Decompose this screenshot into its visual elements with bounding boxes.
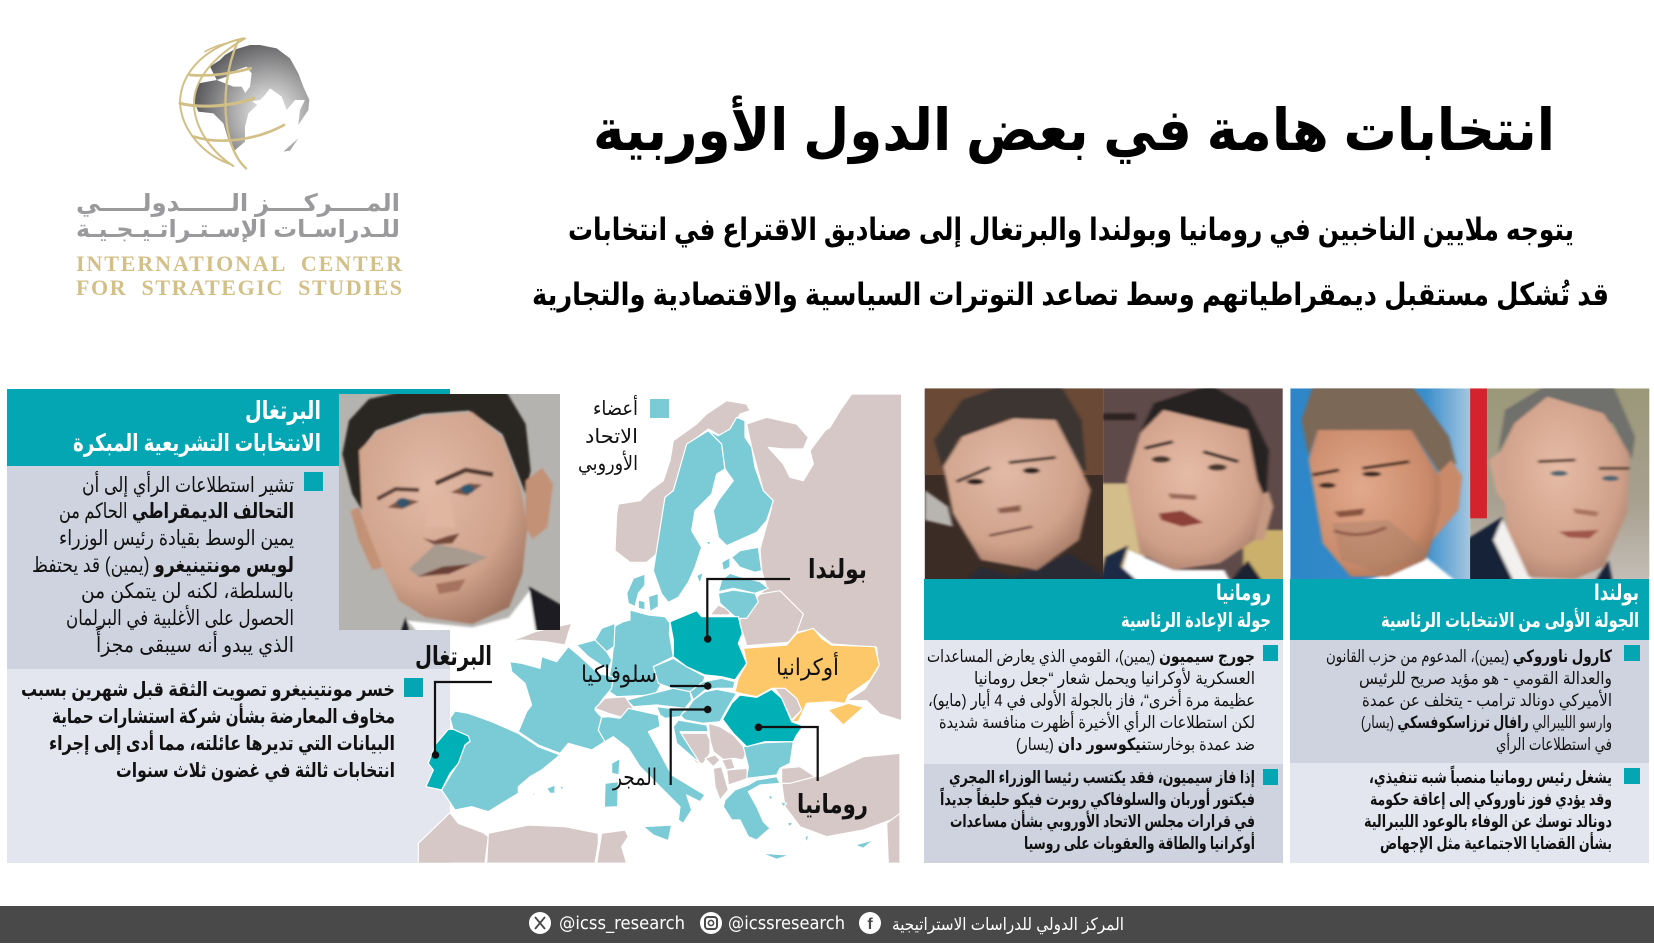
legend text: الأوروبي [578, 451, 638, 476]
body block 1: الأميركي دونالد ترامب - يتخلف عن عمدة [1362, 690, 1612, 711]
north: Scandinavia, Finland, Baltics, Russia [615, 394, 902, 721]
body block 2 [1290, 763, 1649, 863]
panel: Poland [1290, 579, 1649, 863]
header country: بولندا [1594, 580, 1639, 606]
logo: ICSS globe and name [76, 38, 403, 300]
body block 1: كارول ناوروكي (يمين)، المدعوم من حزب القانون [1326, 647, 1612, 667]
icon: facebook: f [867, 916, 873, 933]
map of Europe [418, 394, 902, 863]
footer organisation name: المركز الدولي للدراسات الاستراتيجية [892, 915, 1124, 935]
leader dots [432, 635, 762, 759]
body block 2: فيكتور أوربان والسلوفاكي روبرت فيكو حليفاً جديداً [940, 786, 1255, 810]
body block 1: في استطلاعات الرأي [1496, 733, 1612, 755]
bullet square [304, 472, 323, 491]
label: Poland: بولندا [808, 554, 867, 585]
paragraph lines: تشير استطلاعات الرأي إلى أن [82, 471, 294, 498]
leader lines [435, 579, 818, 785]
photos: Romania candidates [925, 385, 1288, 583]
paragraph lines: التحالف الديمقراطي الحاكم من [59, 500, 294, 524]
legend text [578, 395, 638, 476]
paragraph lines [32, 471, 294, 657]
paragraph lines: الحصول على الأغلبية في البرلمان [66, 605, 294, 630]
icon: X [529, 912, 551, 934]
paragraph lines: الذي يبدو أنه سيبقى مجزأً [96, 625, 294, 657]
text block: Portugal bullet 2 [21, 678, 423, 783]
panel: Romania [924, 579, 1283, 863]
highlighted: Romania [723, 689, 803, 747]
paragraph lines: خسر مونتينيغرو تصويت الثقة قبل شهرين بسبب [21, 679, 395, 701]
legend text: أعضاء [593, 395, 638, 420]
map labels and leader lines [415, 554, 868, 820]
body block 2 [924, 764, 1283, 863]
header band [1290, 579, 1649, 640]
body block 1: والعدالة القومي - هو مؤيد صريح للرئيس [1359, 669, 1612, 689]
paragraph lines: انتخابات ثالثة في غضون ثلاث سنوات [116, 760, 395, 783]
icon: instagram [700, 912, 722, 934]
footer handle: X: @icss_research [559, 913, 685, 934]
footer bar [0, 906, 1654, 943]
west: France, Iberia, North Africa [418, 623, 633, 863]
legend text: الاتحاد [585, 426, 638, 448]
paragraph lines: بالسلطة، لكنه لن يتمكن من [81, 580, 294, 603]
body block 2: في قرارات مجلس الاتحاد الأوروبي بشأن مساعدات [950, 810, 1255, 832]
bullet square [404, 678, 423, 697]
label: Slovakia: سلوفاكيا [581, 661, 657, 688]
header country: البرتغال [245, 397, 321, 426]
icon: facebook [859, 912, 881, 934]
header election: الانتخابات التشريعية المبكرة [73, 430, 321, 457]
logo English name line 2: FOR STRATEGIC STUDIES [76, 275, 402, 300]
logo Arabic name line 1: المــــركــــز الــــــدولـــــي [76, 190, 400, 217]
body block 2: إذا فاز سيميون، فقد يكتسب رئيسا الوزراء المجري [949, 768, 1255, 788]
label: Portugal: البرتغال [415, 641, 492, 672]
body block 1: وارسو الليبرالي رافال ترزاسكوفسكي (يسار) [1361, 713, 1612, 733]
Ukraine [735, 628, 879, 722]
logo English name line 1: INTERNATIONAL CENTER [76, 251, 403, 276]
text block: Portugal bullet 1 [32, 471, 323, 657]
Crimea [829, 704, 862, 724]
label: Ukraine: أوكرانيا [776, 652, 839, 681]
east: Italy, Balkans, Romania, Ukraine, Turkey [598, 628, 900, 863]
header election: جولة الإعادة الرئاسية [1121, 610, 1271, 632]
body block 1: عظيمة مرة أخرى“، فاز بالجولة الأولى في 4 أيار (مايو)، [928, 689, 1255, 711]
body block 1: ضد عمدة بوخارستنيكوسور دان (يسار) [1016, 735, 1255, 755]
panel: Portugal background [7, 389, 450, 863]
paragraph lines: البيانات التي تديرها عائلته، مما أدى إلى إجراء [49, 729, 395, 756]
photo: Rafal Trzaskowski [1290, 385, 1470, 583]
map legend [578, 395, 669, 476]
body block 2: أوكرانيا والطاقة والعقوبات على روسيا [1024, 832, 1255, 854]
centre: Germany, Poland, Baltics, Benelux, Alps [577, 573, 768, 723]
title: انتخابات هامة في بعض الدول الأوربية [593, 95, 1555, 165]
body block 1: لكن استطلاعات الرأي الأخيرة أظهرت منافسة شديدة [939, 711, 1255, 733]
photos: Poland candidates [1290, 385, 1649, 583]
photo: Portugal PM Montenegro [339, 391, 566, 634]
body block 1: جورج سيميون (يمين)، القومي الذي يعارض المساعدات [927, 647, 1255, 667]
header country: رومانيا [1216, 580, 1271, 606]
body block 1 [1290, 640, 1649, 763]
paragraph lines: مخاوف المعارضة بشأن شركة استشارات حماية [52, 702, 395, 728]
paragraph lines: لويس مونتينيغرو (يمين) قد يحتفظ [32, 554, 294, 577]
photo: Nicusor Dan [925, 385, 1107, 583]
label: Romania: رومانيا [797, 789, 868, 820]
panel header: Portugal [73, 397, 321, 457]
label: Hungary: المجر [612, 764, 657, 791]
icon: globe [180, 38, 309, 168]
paragraph lines [21, 679, 395, 783]
photo: George Simion [1098, 385, 1288, 583]
photo: Karol Nawrocki [1465, 385, 1649, 583]
legend swatch [650, 399, 669, 418]
body block 1: العسكرية لأوكرانيا ويحمل شعار “جعل رومانيا [974, 668, 1255, 688]
footer handle: instagram: @icssresearch [728, 913, 845, 934]
body block 1 [924, 640, 1283, 764]
header band [924, 579, 1283, 640]
logo Arabic name line 2: للـدراسـات الإسـتـراتـيـجـيـة [76, 216, 400, 243]
paragraph lines: يمين الوسط بقيادة رئيس الوزراء [59, 527, 294, 550]
